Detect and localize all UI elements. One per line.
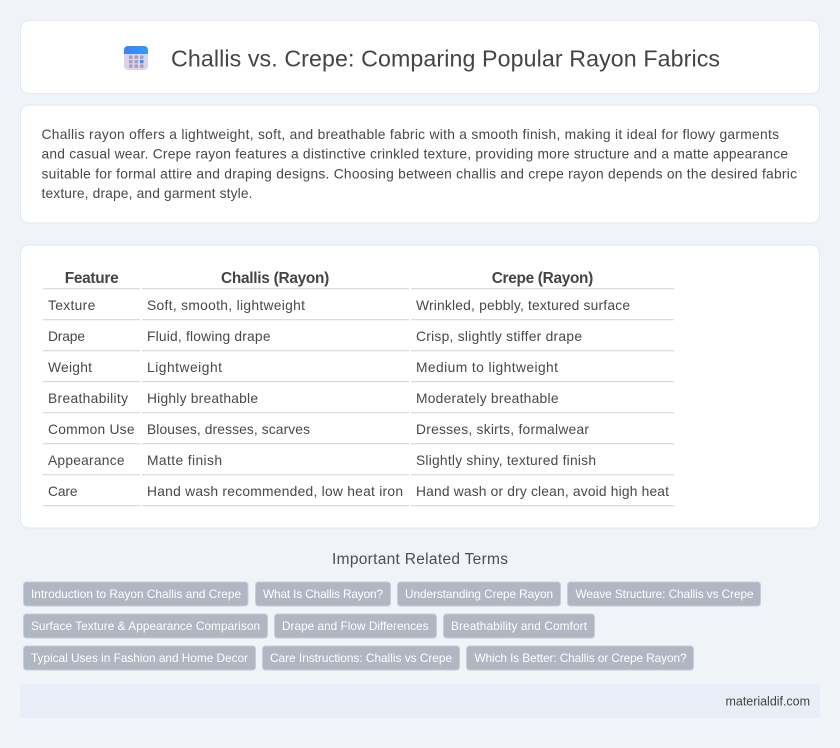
row: common use: Blouses, dresses, scarves (147, 422, 310, 437)
row: appearance: Slightly shiny, textured finish (416, 453, 596, 468)
row: weight: Lightweight (147, 360, 222, 375)
chip: typical uses: Typical Uses in Fashion and Home Decor (31, 651, 248, 665)
chip: care instructions (262, 646, 460, 670)
row: common use (43, 422, 674, 444)
chip: introduction: Introduction to Rayon Challis and Crepe (31, 587, 241, 601)
row: appearance (43, 453, 674, 475)
summary text: texture, drape, and garment style. (42, 186, 252, 201)
panel: summary paragraph (20, 105, 820, 223)
icon: calendar grid (124, 46, 148, 70)
row: weight (43, 360, 674, 382)
row: breathability: Breathability (48, 391, 128, 406)
chip: what is challis: What Is Challis Rayon? (263, 587, 383, 601)
chip: understanding crepe (398, 582, 560, 606)
panel: title header (20, 20, 820, 94)
chip: weave structure (568, 582, 760, 606)
chip: weave structure: Weave Structure: Challis vs Crepe (576, 587, 754, 601)
row: drape: Drape (48, 329, 85, 344)
row: drape: Crisp, slightly stiffer drape (416, 329, 582, 344)
chip: which is better (466, 646, 694, 670)
chip: care instructions: Care Instructions: Challis vs Crepe (270, 651, 452, 665)
row: care: Care (48, 484, 78, 499)
row: appearance: Appearance (48, 453, 125, 468)
row: drape (43, 329, 674, 351)
row: weight: Medium to lightweight (416, 360, 558, 375)
row: weight: Weight (48, 360, 92, 375)
row: care (43, 484, 674, 506)
title: Challis vs. Crepe: Comparing Popular Rayon Fabrics (171, 46, 720, 72)
summary text: and casual wear. Crepe rayon features a distinctive crinkled texture, providing more structure and a matte appearance (42, 147, 788, 162)
chip: breathability: Breathability and Comfort (451, 619, 588, 633)
row: common use: Dresses, skirts, formalwear (416, 422, 589, 437)
table header row (43, 270, 674, 289)
row: texture: Texture (48, 298, 96, 313)
chip: introduction (24, 582, 248, 606)
chip: what is challis (256, 582, 390, 606)
row: care: Hand wash or dry clean, avoid high heat (416, 484, 669, 499)
summary text: suitable for formal attire and draping designs. Choosing between challis and crepe rayon depends on the desired fabric (42, 166, 797, 181)
row: breathability: Moderately breathable (416, 391, 559, 406)
chip: surface texture (24, 614, 268, 638)
footer source text: materialdif.com (726, 694, 810, 708)
row: texture: Soft, smooth, lightweight (147, 298, 305, 313)
row: texture: Wrinkled, pebbly, textured surface (416, 298, 630, 313)
heading: important related terms: Important Related Terms (332, 551, 508, 568)
chip: surface texture: Surface Texture & Appearance Comparison (31, 619, 260, 633)
summary text (42, 127, 797, 201)
table header row: Crepe (Rayon) (492, 270, 593, 287)
chip: drape and flow: Drape and Flow Differences (282, 619, 429, 633)
row: drape: Fluid, flowing drape (147, 329, 271, 344)
row: texture (43, 298, 674, 320)
summary text: Challis rayon offers a lightweight, soft, and breathable fabric with a smooth finish, making it ideal for flowy garments (42, 127, 779, 142)
table header row: Challis (Rayon) (221, 270, 329, 287)
row: common use: Common Use (48, 422, 135, 437)
chip: typical uses (24, 646, 256, 670)
row: breathability (43, 391, 674, 413)
chip: understanding crepe: Understanding Crepe Rayon (405, 587, 553, 601)
chip: which is better: Which Is Better: Challis or Crepe Rayon? (474, 651, 687, 665)
related term chips (24, 582, 760, 670)
row: breathability: Highly breathable (147, 391, 258, 406)
row: care: Hand wash recommended, low heat iron (147, 484, 403, 499)
chip: drape and flow (274, 614, 436, 638)
row: appearance: Matte finish (147, 453, 222, 468)
chip: breathability (444, 614, 594, 638)
table header row: Feature (65, 270, 119, 287)
panel: comparison table (20, 245, 820, 528)
footer bar (20, 684, 820, 718)
